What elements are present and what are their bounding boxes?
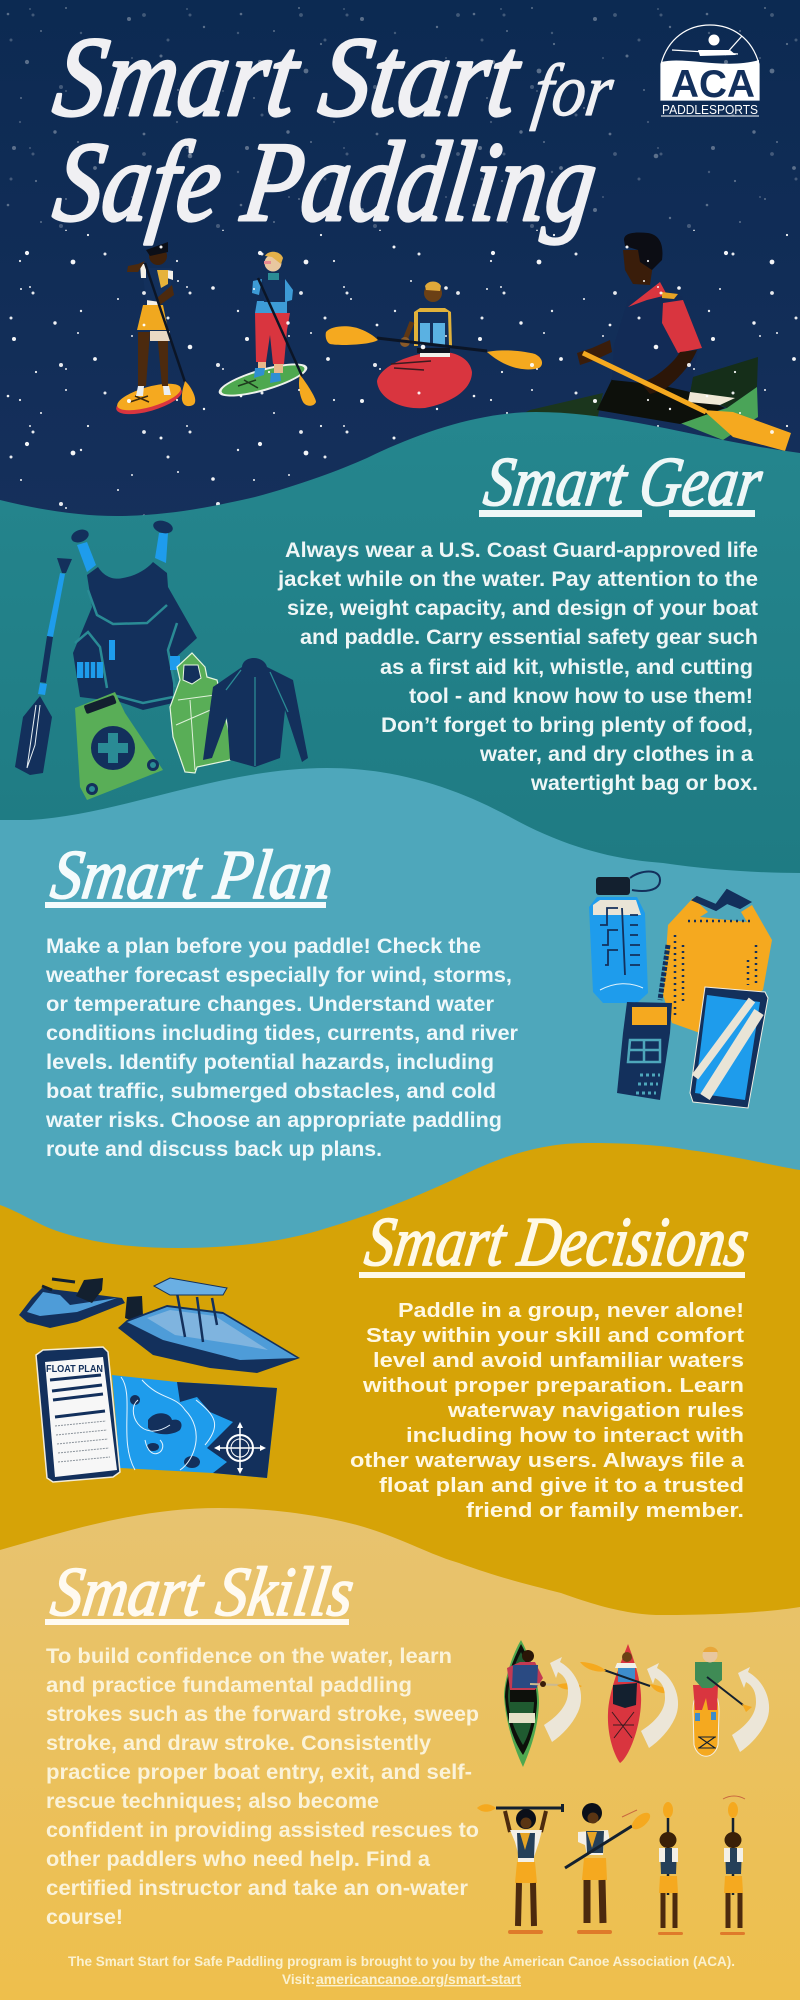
stars [0, 0, 800, 560]
text: smart skills body: strokes such as the forward stroke, sweep [46, 1703, 479, 1726]
illustration: standing paddler postures [477, 1796, 745, 1935]
text: smart gear body: Always wear a U.S. Coast Guard-approved life [285, 539, 758, 562]
text: smart gear body: watertight bag or box. [530, 772, 758, 795]
icon: paddler holding paddle diagonally [565, 1803, 653, 1934]
icon: curved arrow 2 [641, 1663, 678, 1748]
icon: green rain jacket [170, 653, 233, 773]
text: smart gear body: tool - and know how to use them! [409, 685, 753, 708]
text: smart plan body: water risks. Choose an appropriate paddling [45, 1109, 502, 1132]
icon: curved arrow 3 [732, 1667, 769, 1752]
icon: paddler holding paddle overhead [477, 1804, 564, 1934]
text: smart plan body: Make a plan before you paddle! Check the [46, 935, 481, 958]
text: smart plan body: weather forecast especially for wind, storms, [45, 964, 512, 987]
icon: smartphone [690, 987, 768, 1108]
text: smart plan body: or temperature changes. Understand water [46, 993, 494, 1016]
text: smart gear body: water, and dry clothes in a [479, 743, 753, 766]
text: smart decisions body: other waterway users. Always file a [350, 1449, 745, 1472]
icon: curved arrow 1 [544, 1657, 581, 1742]
text: smart decisions body: without proper preparation. Learn [362, 1374, 744, 1397]
title: for [529, 50, 619, 132]
illustration: plan gear [589, 872, 772, 1108]
panel: night sky hero background [0, 0, 800, 560]
text: smart skills body: To build confidence on the water, learn [46, 1645, 452, 1668]
text: smart decisions body: waterway navigation rules [447, 1399, 744, 1422]
title: Safe Paddling [48, 118, 604, 245]
icon: dry bag [663, 890, 772, 1033]
icon: canoe top view [504, 1640, 582, 1767]
logo: ACA Paddlesports [661, 25, 759, 117]
illustration: safety gear [15, 519, 308, 800]
panel: smart skills background [0, 1508, 800, 2000]
logo: ACA Paddlesports: PADDLESPORTS [662, 103, 758, 117]
text: smart plan body: boat traffic, submerged obstacles, and cold [46, 1080, 496, 1103]
icon: phone with float plan [36, 1347, 120, 1482]
icon: map with compass [112, 1375, 277, 1478]
footer [68, 1953, 735, 1987]
icon: life jacket [69, 519, 197, 710]
text: smart skills body: stroke, and draw stroke. Consistently [46, 1732, 431, 1755]
text: smart decisions body: Paddle in a group, never alone! [398, 1299, 744, 1322]
icon: marine radio [617, 945, 672, 1100]
icon: first aid bag [75, 692, 163, 800]
footer: The Smart Start for Safe Paddling program is brought to you by the American Canoe Association (ACA). [68, 1953, 735, 1969]
text: smart plan body: route and discuss back up plans. [46, 1138, 382, 1161]
icon: kayak top view [580, 1644, 672, 1763]
text: smart decisions body [350, 1299, 745, 1522]
icon: paddler rotating paddle with arrow [720, 1796, 745, 1935]
illustration: paddlers on the water [113, 233, 791, 451]
icon: paddleboard top view [693, 1647, 752, 1756]
logo: ACA Paddlesports: ACA [671, 63, 755, 106]
panel: smart gear background [0, 412, 800, 900]
icon: jet ski [19, 1278, 125, 1328]
panel: smart decisions background [0, 1143, 800, 2000]
icon: phone with float plan: FLOAT PLAN [46, 1363, 103, 1375]
illustration: boats and float plan [19, 1278, 300, 1482]
text: smart gear body [277, 539, 758, 795]
text: smart plan body [45, 935, 518, 1161]
illustration: paddle strokes from above [504, 1640, 769, 1767]
icon: center console boat [118, 1278, 300, 1373]
title [48, 13, 619, 245]
text: smart skills body: other paddlers who need help. Find a [46, 1848, 430, 1871]
text: smart skills body: and practice fundamental paddling [46, 1674, 412, 1697]
footer: Visit: [282, 1971, 315, 1987]
text: smart gear body: size, weight capacity, and design of your boat [287, 597, 758, 620]
text: smart skills body: rescue techniques; also become [46, 1790, 379, 1813]
text: smart skills body: confident in providing assisted rescues to [46, 1819, 479, 1842]
text: smart skills body [46, 1645, 479, 1929]
footer: americancanoe.org/smart-start [316, 1971, 521, 1987]
icon: kayaker in red kayak [326, 282, 542, 408]
text: smart decisions body: level and avoid unfamiliar waters [373, 1349, 744, 1372]
panel: smart plan background [0, 768, 800, 1300]
text: smart plan body: levels. Identify potential hazards, including [46, 1051, 494, 1074]
icon: stand up paddler with green board [216, 252, 316, 406]
title: Smart Start [48, 13, 529, 140]
heading: smart plan: Smart Plan [47, 836, 338, 914]
text: smart gear body: jacket while on the water. Pay attention to the [277, 568, 758, 591]
text: smart skills body: practice proper boat entry, exit, and self- [46, 1761, 472, 1784]
icon: water bottle [589, 872, 660, 1003]
text: smart gear body: as a first aid kit, whistle, and cutting [380, 656, 753, 679]
icon: canoeist with paddle [510, 233, 791, 451]
text: smart gear body: Don’t forget to bring plenty of food, [381, 714, 753, 737]
text: smart gear body: and paddle. Carry essential safety gear such [300, 626, 758, 649]
icon: paddle [15, 558, 72, 775]
heading: smart skills: Smart Skills [47, 1553, 359, 1631]
text: smart skills body: course! [46, 1906, 123, 1929]
text: smart decisions body: float plan and give it to a trusted [379, 1474, 744, 1497]
text: smart decisions body: friend or family member. [466, 1499, 744, 1522]
icon: paddler holding paddle vertically front [658, 1802, 683, 1935]
text: smart decisions body: Stay within your skill and comfort [366, 1324, 744, 1347]
text: smart decisions body: including how to interact with [406, 1424, 744, 1447]
text: smart skills body: certified instructor and take an on-water [46, 1877, 468, 1900]
icon: navy paddling jacket [203, 658, 308, 767]
text: smart plan body: conditions including tides, currents, and river [46, 1022, 518, 1045]
icon: stand up paddler with orange board [113, 242, 195, 420]
